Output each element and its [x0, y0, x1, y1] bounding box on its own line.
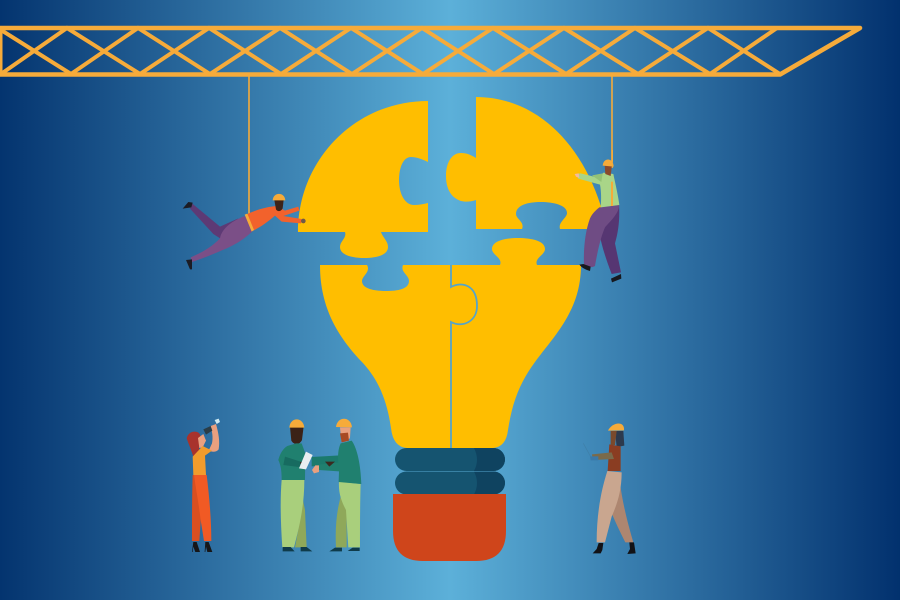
worker two: [312, 419, 361, 551]
puzzle piece: top left: [298, 101, 428, 258]
bulb screw thread: [395, 448, 505, 494]
bulb base: [393, 494, 506, 561]
figure: hanging worker on right rope: [575, 150, 621, 282]
puzzle seam: [451, 265, 477, 448]
figure: flying worker on left rope: [183, 194, 306, 269]
crane truss: [0, 28, 860, 74]
light bulb: [298, 97, 607, 561]
puzzle piece: lower right: [451, 238, 581, 448]
figure: woman with tablet: [583, 423, 636, 554]
figure: woman with camera: [187, 419, 220, 552]
ropes: [249, 76, 612, 214]
puzzle piece: top right: [446, 97, 607, 229]
worker one: [278, 419, 313, 551]
figures: two workers shaking hands: [278, 419, 361, 551]
puzzle piece: lower left: [320, 265, 451, 448]
